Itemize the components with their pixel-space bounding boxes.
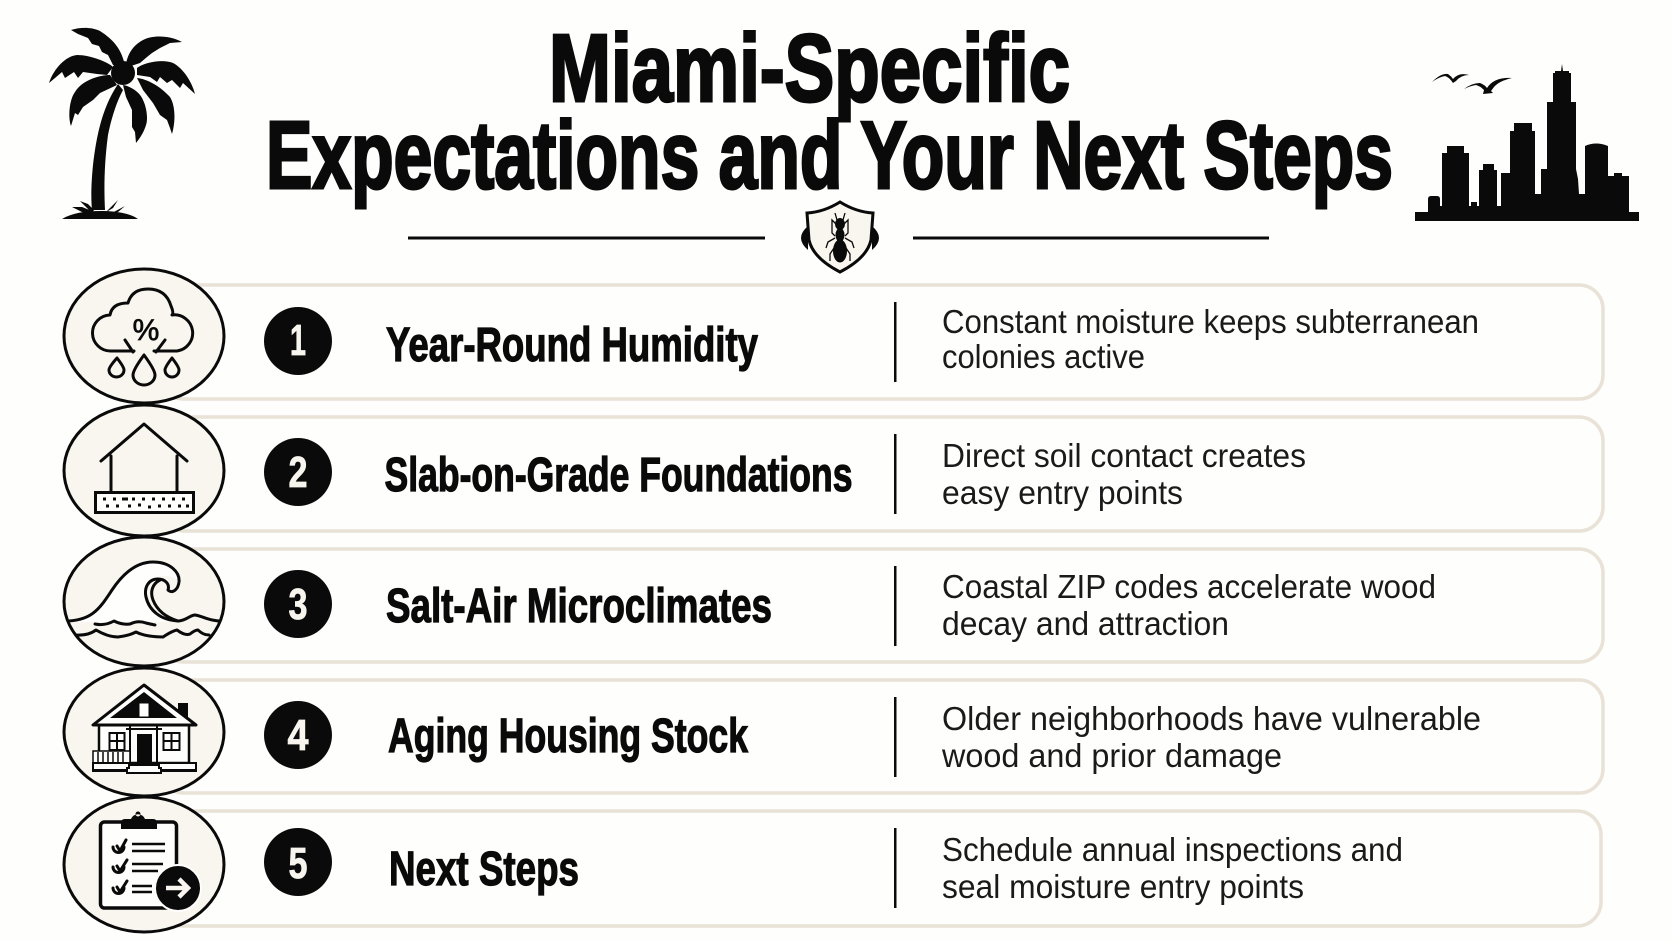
number badge 1: 1	[290, 316, 306, 365]
number badge 5: 5	[288, 839, 308, 888]
description 3: decay and attraction	[942, 605, 1229, 642]
description 1	[942, 303, 1479, 375]
icon: city skyline with birds	[1415, 64, 1639, 221]
icon: house on slab foundation	[64, 405, 224, 536]
number badge 2: 2	[288, 448, 308, 497]
divider line left	[408, 236, 765, 240]
title	[266, 15, 1393, 209]
icon: termite shield	[801, 202, 879, 272]
heading 4: Aging Housing Stock	[388, 710, 748, 763]
icon: palm tree	[49, 28, 195, 219]
icon: cloud with humidity percent and drops: %	[133, 314, 159, 347]
panel: row 3 salt-air microclimates	[160, 549, 1603, 662]
divider 2	[894, 434, 896, 514]
divider line right	[913, 236, 1269, 240]
description 2: Direct soil contact creates	[942, 437, 1306, 474]
heading 5: Next Steps	[389, 843, 579, 896]
heading 1: Year-Round Humidity	[386, 319, 758, 372]
description 4: wood and prior damage	[941, 737, 1282, 774]
description 5	[942, 831, 1403, 905]
icon: clipboard checklist with arrow	[64, 797, 224, 932]
description 2: easy entry points	[942, 474, 1183, 511]
panel: row 4 aging housing stock	[160, 680, 1603, 793]
panel: row 1 year-round humidity	[160, 285, 1603, 399]
description 5: seal moisture entry points	[942, 868, 1304, 905]
divider 5	[894, 828, 896, 908]
number badge 1	[264, 307, 332, 375]
number badge 4: 4	[288, 711, 309, 760]
number badge 5	[264, 828, 332, 896]
heading 2: Slab-on-Grade Foundations	[384, 449, 852, 502]
number badge 3: 3	[288, 580, 308, 629]
title: Miami-Specific	[549, 15, 1070, 122]
description 5: Schedule annual inspections and	[942, 831, 1403, 868]
number badge 2	[264, 438, 332, 506]
description 3: Coastal ZIP codes accelerate wood	[942, 568, 1436, 605]
description 3	[942, 568, 1436, 642]
description 2	[942, 437, 1306, 511]
heading 3: Salt-Air Microclimates	[386, 580, 772, 633]
description 1: colonies active	[942, 338, 1145, 375]
divider 3	[894, 566, 896, 646]
number badge 4	[264, 701, 332, 769]
icon: older house	[64, 668, 224, 796]
description 4: Older neighborhoods have vulnerable	[942, 700, 1481, 737]
number badge 3	[264, 570, 332, 638]
panel: row 5 next steps	[160, 811, 1601, 926]
divider 4	[894, 697, 896, 777]
description 1: Constant moisture keeps subterranean	[942, 303, 1479, 340]
icon: cloud with humidity percent and drops	[64, 269, 224, 403]
divider 1	[894, 302, 896, 382]
panel: row 2 slab-on-grade foundations	[160, 417, 1603, 531]
icon: ocean wave	[62, 537, 226, 666]
description 4	[941, 700, 1481, 774]
